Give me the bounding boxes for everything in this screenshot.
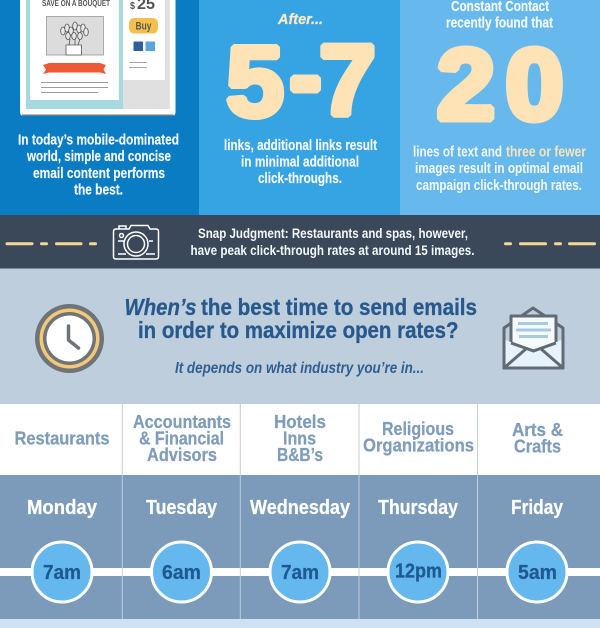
column: hotels: 7am: [281, 562, 319, 584]
heading: [124, 294, 477, 343]
number: 5-7: -: [290, 20, 322, 132]
column: religious organizations: Organizations: [363, 436, 474, 456]
panel: best time: [0, 268, 600, 404]
text: lines description: lines of text and: [413, 144, 502, 160]
text: lines description: [413, 144, 586, 194]
text: simple content: the best.: [74, 182, 123, 198]
column: accountants: 6am: [162, 562, 201, 584]
column: hotels: [250, 412, 351, 602]
dashes: left: [7, 242, 96, 245]
column: restaurants: Monday: [27, 497, 98, 519]
text: constant contact: [446, 0, 553, 32]
column: hotels: Wednesday: [250, 497, 351, 519]
text: snap judgment: [190, 226, 474, 258]
text: lines description: three or fewer: [506, 144, 586, 160]
icon: phone email mockup: [20, 0, 176, 116]
column: religious organizations: [363, 419, 474, 602]
heading: in order to maximize open rates?: [138, 317, 458, 343]
column: accountants: [133, 412, 231, 602]
number: 5-7: 5: [226, 26, 284, 138]
heading: the best time to send emails: [201, 294, 477, 320]
text: links description: in minimal additional: [241, 154, 359, 170]
text: snap judgment: have peak click-through rates at around 15 images.: [190, 243, 474, 258]
table: industry schedule: [0, 404, 600, 628]
icon: phone email mockup: $: [130, 1, 135, 12]
text: snap judgment: Snap Judgment: Restaurants and spas, however,: [198, 226, 468, 241]
column: religious organizations: Religious: [382, 419, 454, 439]
panel: simple content: [0, 0, 199, 215]
number: 20: [437, 29, 564, 141]
column: hotels: B&B’s: [277, 445, 323, 465]
panel: lines of text: [400, 0, 600, 215]
icon: open envelope: [504, 308, 563, 368]
column: religious organizations: 12pm: [395, 560, 442, 582]
column: arts and crafts: [507, 420, 567, 602]
text: simple content: [18, 132, 179, 198]
column: accountants: Tuesday: [146, 497, 218, 519]
column: restaurants: Restaurants: [14, 428, 110, 448]
column: accountants: Accountants: [133, 412, 231, 432]
column: hotels: Inns: [283, 428, 316, 448]
column: arts and crafts: Friday: [511, 497, 564, 519]
subheading: It depends on what industry you’re in...: [175, 360, 424, 377]
number: 5-7: 7: [319, 24, 376, 136]
icon: phone email mockup: Buy: [136, 20, 152, 32]
text: constant contact: recently found that: [446, 16, 553, 32]
panel: links: [199, 0, 400, 215]
text: simple content: world, simple and concise: [26, 149, 171, 165]
dashes: right: [506, 242, 594, 245]
number: 20: 2: [437, 29, 495, 141]
number: 5-7: [226, 20, 376, 138]
icon: clock: [35, 304, 104, 373]
icon: camera: [114, 226, 158, 259]
number: 20: 0: [506, 29, 564, 141]
column: religious organizations: Thursday: [378, 497, 459, 519]
text: simple content: email content performs: [33, 166, 165, 182]
column: arts and crafts: 5am: [518, 562, 557, 584]
heading: When’s: [124, 294, 196, 320]
column: arts and crafts: Crafts: [514, 436, 561, 456]
column: restaurants: 7am: [43, 562, 81, 584]
column: accountants: & Financial: [139, 428, 224, 448]
column: hotels: Hotels: [274, 412, 326, 432]
column: accountants: Advisors: [147, 445, 217, 465]
column: arts and crafts: Arts &: [512, 420, 563, 440]
text: after: After...: [277, 11, 323, 28]
text: links description: [224, 138, 377, 187]
column: restaurants: [14, 428, 110, 602]
text: links description: links, additional links result: [224, 138, 377, 154]
text: simple content: In today’s mobile-dominated: [18, 132, 179, 148]
banner: snap judgment: [0, 215, 600, 268]
text: links description: click-throughs.: [258, 171, 342, 187]
